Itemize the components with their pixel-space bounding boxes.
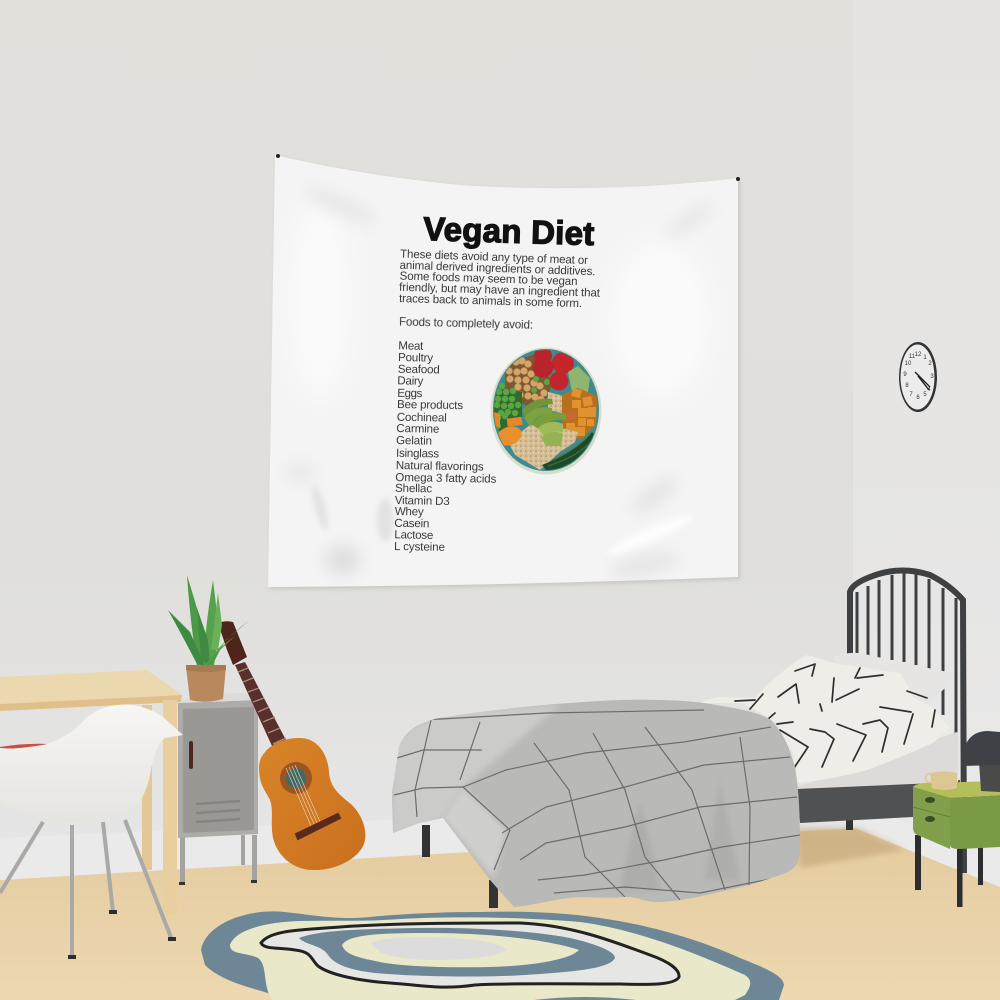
foods to avoid list: Carmine bbox=[396, 422, 439, 436]
blanket fabric bbox=[392, 700, 800, 907]
guitar frets bbox=[238, 668, 291, 755]
desk bbox=[0, 670, 182, 915]
classical guitar bbox=[218, 621, 365, 870]
foods to avoid list: Bee products bbox=[397, 398, 463, 412]
rug inner blue bbox=[299, 928, 615, 977]
wall: right bbox=[853, 0, 1000, 890]
tomatoes bbox=[534, 350, 552, 360]
greens bbox=[542, 432, 594, 470]
peas bbox=[492, 388, 522, 432]
description text bbox=[399, 248, 601, 310]
foods to avoid list: Gelatin bbox=[396, 434, 432, 448]
floor bbox=[0, 828, 1000, 1000]
foods to avoid list: Vitamin D3 bbox=[395, 494, 450, 508]
pin: left bbox=[276, 154, 280, 158]
chair feet bbox=[68, 910, 176, 959]
chair shell bbox=[0, 704, 183, 822]
potted aloe plant bbox=[168, 575, 250, 702]
clock numerals: 2 bbox=[928, 361, 932, 367]
duvet pattern bbox=[735, 664, 935, 768]
description text: friendly, but may have an ingredient that bbox=[399, 281, 601, 300]
title: Vegan Diet bbox=[423, 210, 595, 252]
bed frame bbox=[797, 780, 960, 823]
sweet potato bbox=[562, 388, 597, 440]
white shell chair bbox=[0, 704, 183, 959]
foods to avoid list: Omega 3 fatty acids bbox=[395, 471, 497, 486]
clock numerals: 9 bbox=[903, 372, 907, 378]
aloe leaves bbox=[168, 575, 250, 666]
description text: animal derived ingredients or additives. bbox=[399, 259, 596, 278]
desk front leg bbox=[163, 700, 177, 915]
mug bbox=[930, 772, 957, 790]
clock numerals: 4 bbox=[927, 387, 931, 393]
drawer handles bbox=[925, 797, 935, 822]
cucumber bbox=[568, 366, 590, 392]
nightstand front bbox=[913, 787, 950, 849]
cabinet legs bbox=[180, 835, 257, 882]
cabinet top bbox=[178, 693, 258, 703]
foods to avoid list: Eggs bbox=[397, 387, 423, 400]
clock hands bbox=[915, 372, 930, 390]
cabinet vents bbox=[196, 801, 240, 822]
nightstand top bbox=[913, 781, 1000, 798]
guitar headstock bbox=[218, 621, 247, 665]
round abstract rug bbox=[201, 911, 784, 1000]
clock numerals: 11 bbox=[909, 354, 916, 360]
nightstand side bbox=[950, 795, 1000, 849]
avocado bbox=[522, 398, 553, 417]
carrot bbox=[498, 426, 522, 446]
table lamp bbox=[962, 731, 1000, 792]
desk front edge bbox=[0, 695, 182, 711]
cabinet feet bbox=[179, 880, 257, 885]
wall tapestry bbox=[268, 154, 740, 589]
nightstand legs bbox=[915, 835, 983, 907]
clock numerals bbox=[903, 352, 934, 401]
clock numerals: 12 bbox=[915, 352, 922, 358]
baseboard: left wall bbox=[0, 816, 470, 880]
green nightstand bbox=[913, 731, 1000, 907]
desk top bbox=[0, 670, 182, 704]
foods to avoid list: Shellac bbox=[395, 482, 432, 495]
rug black ring with white band bbox=[261, 923, 679, 987]
upper quinoa bbox=[548, 392, 562, 413]
chickpeas bbox=[505, 354, 552, 408]
rug centre bbox=[370, 937, 506, 960]
clock numerals: 7 bbox=[909, 392, 913, 398]
metal locker cabinet bbox=[178, 693, 258, 885]
headboard bbox=[850, 570, 964, 873]
baseboard: right wall bbox=[853, 808, 1000, 887]
plaid blanket bbox=[392, 700, 800, 907]
bowl rim bbox=[490, 348, 602, 474]
front bed leg bbox=[489, 880, 498, 908]
list heading: Foods to completely avoid: bbox=[399, 316, 533, 332]
chair seat accent bbox=[0, 744, 48, 749]
duvet bbox=[700, 655, 950, 783]
description text: These diets avoid any type of meat or bbox=[400, 248, 588, 267]
pillow bbox=[833, 653, 953, 702]
cabinet body bbox=[178, 700, 258, 838]
drawer divider bbox=[913, 807, 950, 817]
blanket plaid lines bbox=[394, 710, 800, 900]
foods to avoid list bbox=[394, 339, 497, 554]
foods to avoid list: Casein bbox=[394, 517, 429, 530]
guitar rosette bbox=[280, 762, 312, 794]
desk back leg bbox=[142, 705, 152, 870]
guitar bridge bbox=[296, 814, 340, 839]
wall: left bbox=[0, 0, 853, 880]
guitar strings bbox=[286, 765, 321, 828]
foods to avoid list: Isinglass bbox=[396, 447, 439, 460]
wall clock bbox=[899, 342, 937, 412]
blanket shading bbox=[392, 705, 740, 890]
guitar sound hole bbox=[286, 768, 306, 788]
rug outer blue bbox=[201, 911, 784, 1000]
clock face bbox=[900, 344, 934, 410]
clock rim bbox=[899, 342, 937, 412]
food bowl bbox=[490, 347, 602, 475]
clock numerals: 8 bbox=[905, 383, 909, 389]
left bed leg bbox=[422, 825, 430, 857]
clock numerals: 5 bbox=[923, 392, 927, 398]
foods to avoid list: Meat bbox=[398, 339, 424, 353]
tapestry shadow bbox=[270, 157, 740, 589]
description text: Some foods may seem to be vegan bbox=[399, 270, 578, 288]
foods to avoid list: Seafood bbox=[398, 363, 440, 376]
rug inner cream bbox=[342, 933, 579, 967]
mug handle bbox=[926, 774, 932, 782]
tapestry cloth bbox=[268, 155, 738, 587]
lamp base bbox=[979, 762, 1000, 792]
foods to avoid list: Whey bbox=[395, 505, 424, 519]
foods to avoid list: Lactose bbox=[394, 528, 433, 542]
pin: right bbox=[736, 177, 740, 181]
mattress bbox=[797, 732, 958, 789]
clock numerals: 6 bbox=[916, 395, 920, 401]
cloth folds bbox=[284, 181, 718, 580]
shadow under bed bbox=[795, 828, 905, 868]
bed bbox=[392, 570, 964, 908]
clock numerals: 10 bbox=[905, 361, 912, 367]
rug lower blue bbox=[534, 997, 636, 1000]
description text: traces back to animals in some form. bbox=[399, 292, 582, 310]
lamp shade bbox=[962, 731, 1000, 766]
clock numerals: 1 bbox=[923, 355, 927, 361]
guitar body bbox=[259, 738, 365, 870]
foods to avoid list: Cochineal bbox=[397, 411, 447, 425]
cabinet handle bbox=[189, 741, 193, 769]
bed leg bbox=[846, 820, 853, 830]
guitar neck bbox=[235, 662, 298, 770]
foods to avoid list: Dairy bbox=[397, 374, 424, 388]
chair legs bbox=[0, 820, 172, 958]
terracotta pot bbox=[186, 666, 226, 702]
clock numerals: 3 bbox=[930, 374, 934, 380]
foods to avoid list: Natural flavorings bbox=[396, 459, 484, 474]
cabinet door bbox=[183, 707, 254, 833]
bowl inside bbox=[493, 349, 599, 471]
quinoa bbox=[508, 425, 578, 470]
rug cream band bbox=[230, 917, 750, 1000]
foods to avoid list: L cysteine bbox=[394, 540, 445, 554]
foods to avoid list: Poultry bbox=[398, 351, 433, 365]
pot rim bbox=[186, 665, 226, 672]
